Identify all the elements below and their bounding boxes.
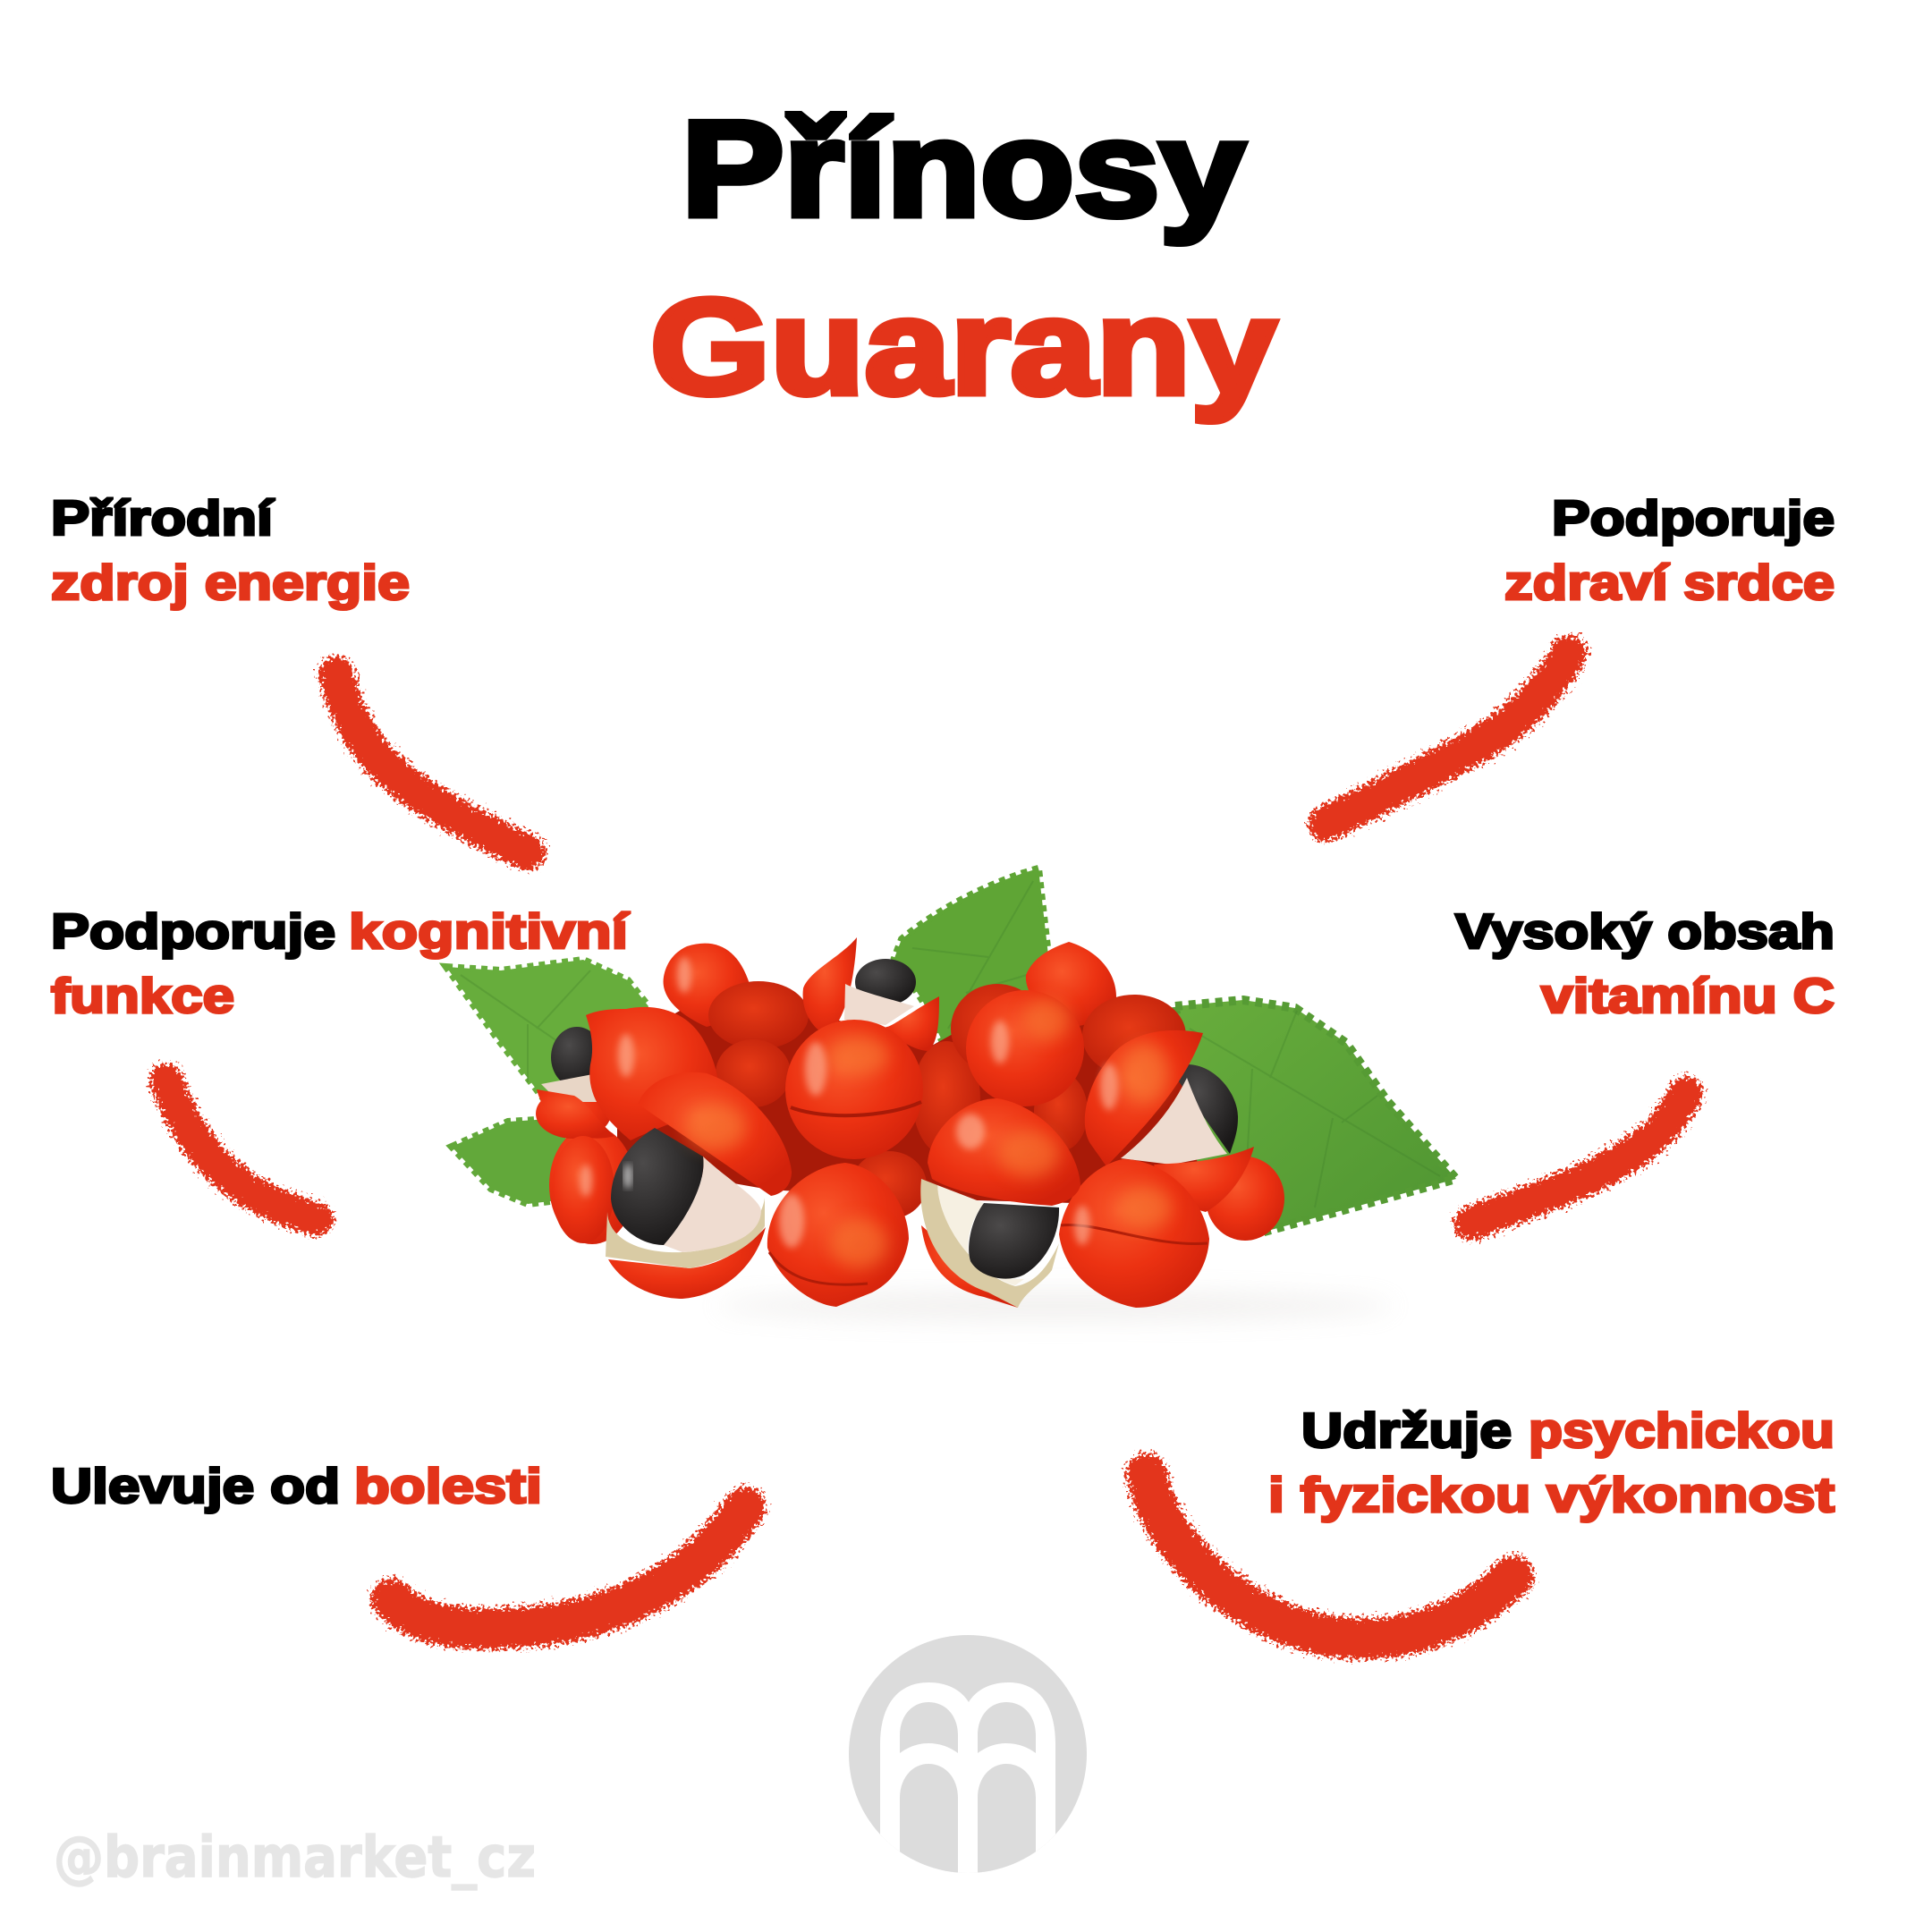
title line: Přínosy: Přínosy: [682, 93, 1245, 245]
leaf: left upper: [446, 960, 648, 1097]
fruit: open, right: [1085, 1030, 1254, 1212]
label: Přírodní zdroj energie: [51, 490, 410, 610]
title line: Guarany: Guarany: [650, 271, 1276, 423]
label: Podporuje zdraví srdce: [1504, 490, 1835, 610]
husk: [606, 1198, 765, 1268]
logo: [849, 1635, 1087, 1878]
leaf: top: [894, 869, 1048, 1042]
dark backing behind fruit cluster: [617, 1002, 1199, 1203]
fruit creases and highlights: [580, 957, 1208, 1284]
fruit: front bottom right: [1059, 1159, 1209, 1308]
label: Přírodní zdroj energie: Přírodní: [51, 490, 275, 546]
white aril: [937, 1185, 1024, 1285]
label: Vysoký obsah vitamínu C: vitamínu C: [1541, 968, 1835, 1023]
back red shell: [921, 1225, 1018, 1308]
fruit: front bottom centre: [767, 1163, 909, 1307]
brush stroke: top right: [1326, 653, 1569, 824]
guarana fruit illustration: [446, 869, 1456, 1320]
title: [650, 93, 1276, 423]
label: Udržuje psychickou i fyzickou výkonnost: i fyzickou výkonnost: [1268, 1467, 1835, 1522]
label: Podporuje zdraví srdce: Podporuje: [1552, 490, 1835, 546]
leaf veins: [461, 881, 1440, 1225]
black seed: [611, 1128, 704, 1245]
logo: lower columns: [900, 1764, 1036, 1878]
watermark handle: @brainmarket_cz: [54, 1825, 536, 1890]
label: Ulevuje od bolesti: [51, 1458, 542, 1513]
top petal: [928, 1098, 1080, 1206]
fruit: open, top centre: [803, 937, 939, 1051]
label: Udržuje psychickou i fyzickou výkonnost: Udržuje: [1301, 1402, 1512, 1458]
label: Udržuje psychickou i fyzickou výkonnost: psychickou: [1529, 1402, 1835, 1458]
label: Podporuje kognitivní funkce: [51, 903, 630, 1023]
label: Udržuje psychickou i fyzickou výkonnost: [1268, 1402, 1835, 1522]
label: Podporuje kognitivní funkce: funkce: [51, 968, 234, 1023]
leaf: right: [1175, 1000, 1456, 1233]
label: Vysoký obsah vitamínu C: [1455, 903, 1835, 1023]
bottom red shell: [608, 1227, 766, 1299]
label: Ulevuje od bolesti: bolesti: [354, 1458, 542, 1513]
black seed: [969, 1203, 1059, 1279]
fruit: seed on far left: [541, 1027, 603, 1102]
leaf: left lower: [452, 1118, 572, 1204]
husk: [920, 1179, 1059, 1308]
brush stroke: middle left: [166, 1080, 317, 1219]
label: Podporuje zdraví srdce: zdraví srdce: [1504, 555, 1835, 610]
fruit: open, front centre: [920, 1098, 1080, 1308]
white aril: [664, 1157, 761, 1252]
fruits: middle layer: [537, 984, 1084, 1243]
brush stroke: bottom left: [392, 1507, 745, 1629]
brush stroke: middle right: [1470, 1093, 1686, 1224]
label: Přírodní zdroj energie: zdroj energie: [51, 555, 410, 610]
fruit: open, front left: [606, 1072, 792, 1299]
back fruits: [536, 942, 1284, 1244]
logo: upper arches: [900, 1702, 1036, 1753]
logo: white double arch: [880, 1682, 1055, 1878]
ground shadow: [716, 1292, 1395, 1320]
label: Vysoký obsah vitamínu C: Vysoký obsah: [1455, 903, 1835, 959]
label: Ulevuje od bolesti: Ulevuje od: [51, 1458, 340, 1513]
label: Podporuje kognitivní funkce: Podporuje: [51, 903, 335, 959]
brush stroke: top left: [336, 674, 528, 852]
label: Podporuje kognitivní funkce: kognitivní: [349, 903, 630, 959]
brush stroke: bottom right: [1147, 1474, 1513, 1639]
top petal: [638, 1072, 792, 1196]
